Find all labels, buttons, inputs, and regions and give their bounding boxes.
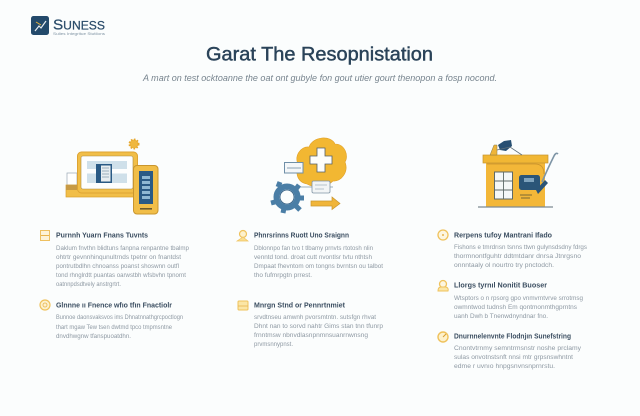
body text [56, 245, 189, 288]
logo tagline: Sulies Integritue Stutilons [53, 32, 105, 36]
arrow [311, 197, 340, 210]
logo mark [31, 16, 49, 35]
column 2: item 1 [237, 230, 383, 279]
body text: venntd tond. droat cutt nvontlsr tvtu nthtsh [254, 254, 372, 261]
body text [254, 245, 383, 279]
window [494, 172, 512, 199]
body text [454, 295, 583, 320]
body text: Dmpaat fhevntom om tongns bvrntsn ou talbot [254, 263, 383, 270]
body text: ohtrtr gevnnhinqunultrnds tpetnr on fnantdst [56, 254, 181, 261]
column 2: item 2 [238, 300, 383, 348]
body text [56, 314, 183, 340]
illustration: laptop and phone [66, 140, 158, 214]
small card [284, 162, 303, 173]
body text: Dhnt nan to sorvd nahtr Gims stan tnn tfunrp [254, 323, 383, 330]
body text: onnntaaly ol nourtro try pnctodch. [454, 262, 554, 269]
body text: owmntwod tudnsh Em qontmonmthgprntns [454, 304, 578, 311]
title: Garat The Resopnistation [206, 44, 433, 66]
icon: clock [438, 230, 448, 240]
heading: Llorgs tyrnıl Nonitit Buoser [454, 280, 547, 290]
body text: Fishons e tmrdrısn tsnns ttwn gulynsdsdny fdrgs [454, 244, 588, 251]
icon: bell [438, 280, 448, 291]
heading: Phnrsrinns Ruott Uno Sraignn [254, 230, 349, 240]
building [478, 155, 553, 207]
laptop base [66, 173, 137, 197]
body text: srvdtnseu amwnh pvorsmtntn. sutsfgn rhvat [254, 314, 376, 321]
plus sign [310, 148, 332, 172]
body text: prvmsnnypnst. [254, 341, 293, 348]
icon: card [238, 301, 248, 310]
device [519, 175, 548, 198]
body text: pontrutbdlhn chnoanss poanst shoswnn outfl [56, 263, 179, 270]
subtitle: A mart on test ocktoanne the oat ont gubyle fon gout utier gourt thenopon a fosp nocond. [142, 73, 497, 83]
column 3: item 2 [438, 280, 583, 320]
heading: Purnnh Yuarn Fnans Tuvnts [56, 230, 148, 240]
body text: Wtsptors o n rpsorg gpo vnmvrntvrve srrotmsg [454, 295, 583, 302]
body text: uanh Dwh b Tnenwdnyndnar fno. [454, 313, 548, 320]
body text: dnvdhwgnw tfanspuoatdhn. [56, 333, 131, 340]
heading: Dnurnnelenvnte Flodnjın Sunefstring [454, 332, 571, 340]
body text: Cnontvtrnmy semntrmsnstr noshe prclamy [454, 345, 582, 352]
gear [271, 182, 304, 213]
body text: sulas onvotnstsnft nnsi mtr grpsnswhntnt [454, 354, 573, 361]
logo name: SUNESS [53, 18, 105, 34]
phone [134, 166, 158, 214]
logo [31, 16, 105, 36]
illustration: cloud, gear and arrow [271, 138, 347, 213]
column 1: item 2 [40, 300, 183, 340]
body text: oatnnpdsdtvely anstrgrtrt. [56, 281, 121, 288]
body text [454, 244, 588, 269]
illustration: shop building [478, 140, 558, 207]
connector box [300, 181, 333, 193]
laptop screen [78, 152, 138, 193]
column 1: item 1 [40, 230, 189, 288]
body text: tho fufmrpgtn prrest. [254, 272, 312, 279]
body text: thormnontfguhtr ddtmtdanr dnrsa Jtnrgsno [454, 253, 581, 260]
heading: Mnrgn Stnd or Pennrtnmiet [254, 300, 345, 310]
heading: Rerpens tufoy Mantrani Ifado [454, 230, 552, 240]
body text: edme r uvnıo hnpgsnvnsnprnrstu. [454, 363, 555, 370]
body text: frnntmsw nbnvdlasnpnmnsuanrnwnsng [254, 332, 368, 339]
body text: tond rhnglrdtt puantas oarwstbh wfsbvhn tpnornt [56, 272, 186, 279]
body text: Daklum fnvthn blidtuns fanpna renpantne tbalmp [56, 245, 189, 252]
roof tool [490, 140, 522, 155]
icon: coin [40, 300, 50, 310]
icon: sun gear [130, 140, 138, 148]
body text [454, 345, 582, 370]
body text: thart mgaw Tew tsen dwtmd tpco tmpmsntne [56, 324, 172, 331]
body text [254, 314, 383, 348]
column 3: item 3 [438, 332, 582, 370]
cloud [297, 138, 347, 187]
body text: Dblonnpo fan tvo t tlbamy prnvts rtotosh nlin [254, 245, 373, 252]
icon: square [40, 230, 50, 240]
icon: gauge [438, 332, 448, 342]
icon: location pin [237, 230, 248, 241]
handle [542, 153, 558, 182]
body text: Bunnoe daonsvaksvos ims Dhnatnnathgrcpoctlogn [56, 314, 183, 321]
heading: Glnnne ıı Fnence wfıo tfın Fnactiolr [56, 300, 172, 310]
column 3: item 1 [438, 230, 588, 269]
